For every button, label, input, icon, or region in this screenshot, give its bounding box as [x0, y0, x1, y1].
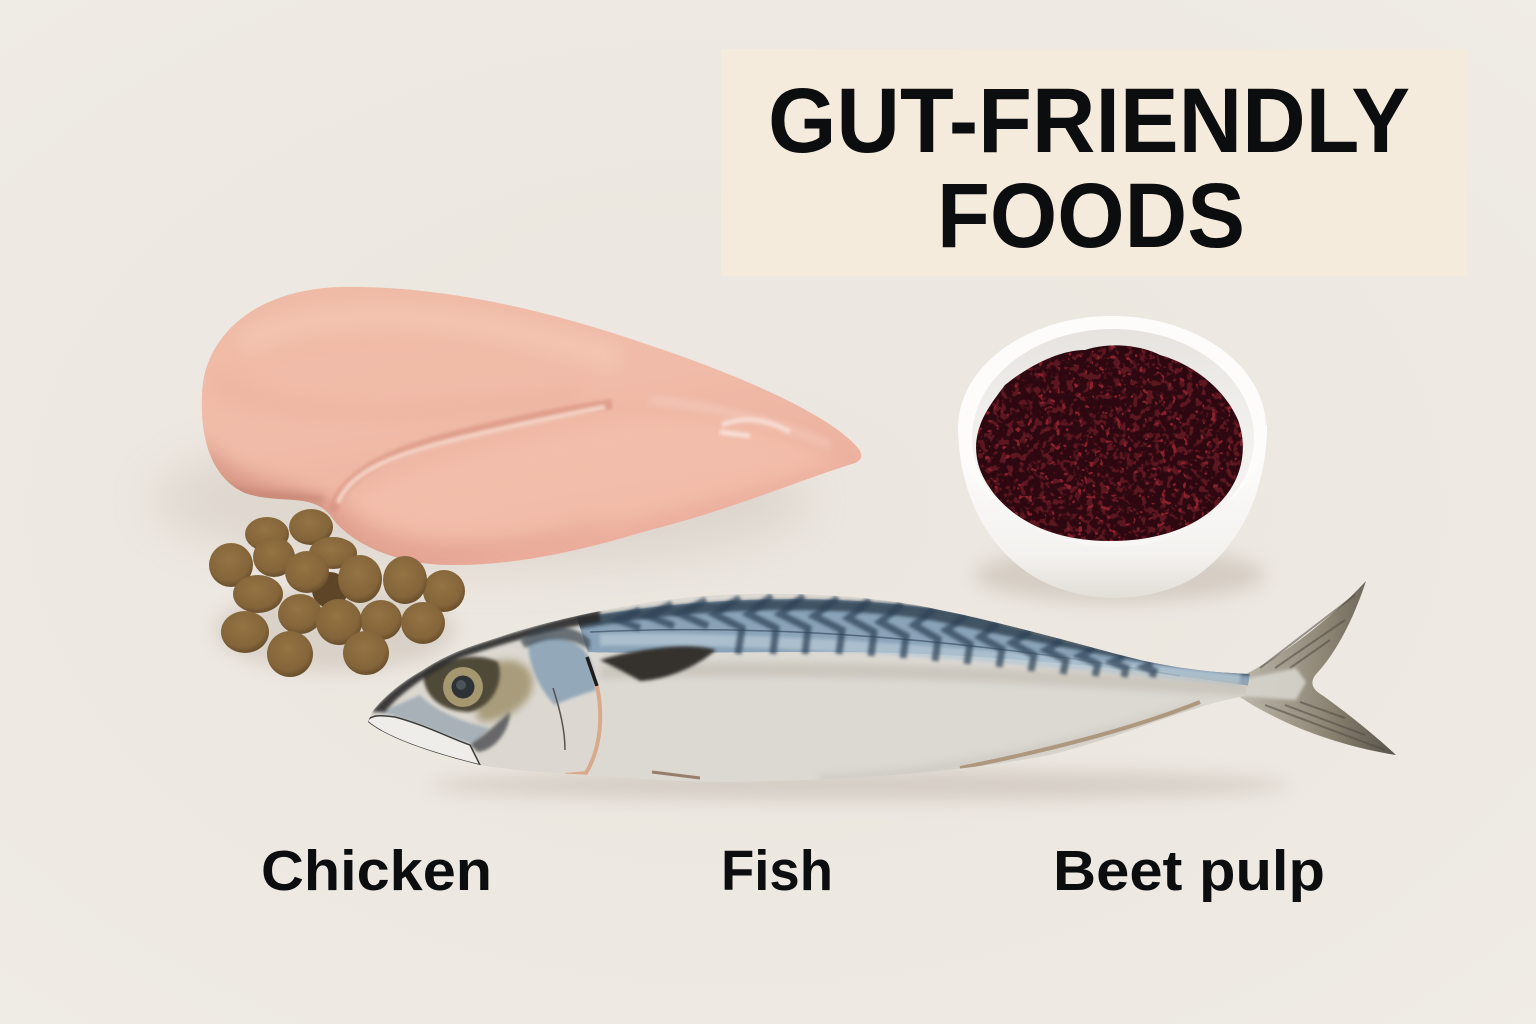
dog kibble pile	[209, 509, 465, 677]
fish head	[360, 610, 600, 776]
fish eye	[443, 667, 483, 707]
title line two: FOODS	[937, 165, 1245, 267]
label: fish: Fish	[721, 839, 833, 903]
label: chicken: Chicken	[261, 839, 492, 903]
beet pulp bowl	[958, 316, 1267, 603]
chicken breast	[162, 286, 862, 572]
title line one: GUT-FRIENDLY	[768, 70, 1410, 172]
back stripes	[618, 596, 1154, 677]
fish tail	[1240, 581, 1396, 755]
mackerel fish	[360, 581, 1396, 801]
infographic canvas	[158, 49, 1467, 902]
title panel	[721, 49, 1467, 276]
beet pulp granules	[976, 345, 1243, 541]
label: beet pulp: Beet pulp	[1053, 839, 1325, 903]
fish pectoral fin	[600, 646, 716, 681]
